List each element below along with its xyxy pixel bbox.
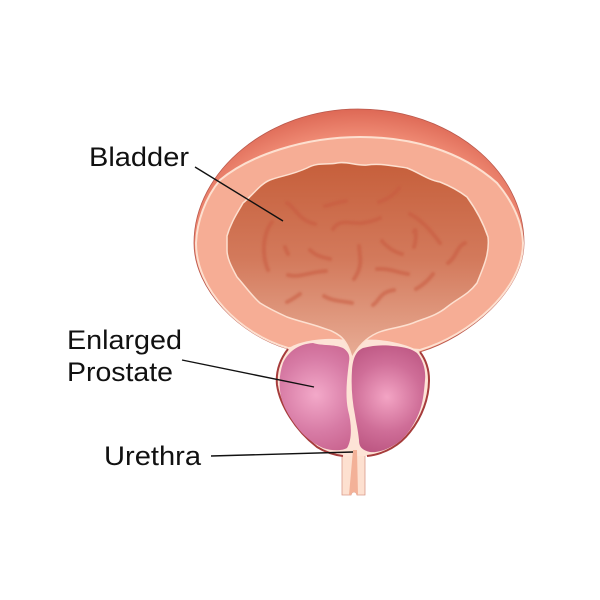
bladder wall bbox=[194, 109, 524, 352]
bladder wrinkles bbox=[264, 188, 465, 305]
left prostate lobe bbox=[280, 343, 351, 450]
bladder outer wall bbox=[194, 109, 524, 352]
label: Urethra: Urethra bbox=[104, 441, 202, 471]
leader line: Urethra bbox=[211, 452, 353, 456]
right prostate lobe bbox=[352, 345, 425, 452]
lumen cavity bbox=[227, 163, 488, 358]
prostate capsule outline: left bbox=[277, 349, 343, 456]
label: Enlarged Prostate bbox=[67, 325, 314, 387]
bladder lumen bbox=[227, 163, 488, 358]
label: Enlarged Prostate: Prostate bbox=[67, 357, 173, 387]
leader line: Enlarged Prostate bbox=[182, 360, 314, 387]
prostate capsule outline: right bbox=[367, 352, 429, 456]
leader line: Bladder bbox=[195, 167, 283, 221]
bladder muscle layer bbox=[196, 137, 523, 350]
urethra tube bbox=[342, 445, 365, 495]
prostate cream capsule bbox=[277, 339, 429, 456]
urethra channel bbox=[349, 450, 358, 495]
label: Urethra bbox=[104, 441, 353, 471]
label: Bladder: Bladder bbox=[89, 142, 189, 172]
label: Enlarged Prostate: Enlarged bbox=[67, 325, 182, 355]
prostate bbox=[277, 339, 429, 495]
label: Bladder bbox=[89, 142, 283, 221]
